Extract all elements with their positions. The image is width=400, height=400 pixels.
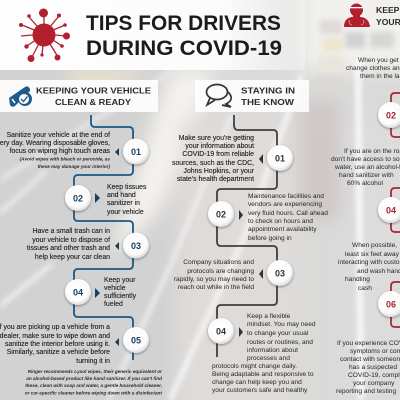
footnote: an alcohol-based product like hand sanitizer. If you can't find bbox=[26, 376, 162, 381]
icon: virus bbox=[19, 8, 70, 62]
step 03 bbox=[174, 259, 293, 291]
step 04: fueled bbox=[104, 301, 123, 308]
icon: speech bubbles bbox=[206, 84, 231, 107]
icon: sanitizer spray and shield bbox=[9, 86, 32, 107]
step 04: 04 bbox=[73, 288, 83, 298]
footnote: or car-specific cleaner before wiping down with a disinfectant bbox=[25, 390, 162, 396]
step 04: vehicle bbox=[104, 285, 126, 292]
step 01: Johns Hopkins, or your bbox=[184, 168, 255, 175]
step 02: your vehicle bbox=[107, 209, 144, 216]
step 04: mindset. You may need bbox=[247, 321, 316, 328]
step 05 bbox=[0, 324, 149, 365]
tip 4: reporting and testing bbox=[336, 388, 396, 395]
timeline: red bbox=[391, 93, 400, 327]
step 02 bbox=[65, 184, 147, 216]
step 01: 01 bbox=[131, 147, 141, 157]
step 05: sanitize the interior before using it. bbox=[5, 341, 110, 348]
step 04: Keep a flexible bbox=[247, 313, 291, 320]
step 01: sources, such as the CDC, bbox=[172, 160, 254, 167]
column 2 steps bbox=[172, 135, 328, 394]
step 02: to check on hours and bbox=[248, 218, 313, 225]
step 04: 04 bbox=[386, 206, 396, 216]
step 01: Sanitize your vehicle at the end of bbox=[7, 132, 110, 139]
heading: STAYING IN bbox=[241, 86, 295, 96]
step 01: focus on wiping high touch areas bbox=[10, 148, 111, 155]
step 04: change can help keep you and bbox=[212, 379, 302, 386]
title: DURING COVID-19 bbox=[86, 37, 282, 60]
step 03 bbox=[27, 228, 149, 261]
title: TIPS FOR DRIVERS bbox=[86, 12, 281, 35]
step 02 bbox=[208, 193, 328, 242]
step 03: Have a small trash can in bbox=[33, 228, 110, 235]
step 01: these may damage your interior) bbox=[38, 164, 110, 169]
step 05: 05 bbox=[131, 336, 141, 346]
step 02: vendors are experiencing bbox=[248, 201, 322, 208]
step 03: reach out while in the field bbox=[178, 284, 254, 291]
step 01: Make sure you're getting bbox=[179, 135, 254, 142]
step 01: 01 bbox=[275, 154, 285, 164]
step 04: sufficiently bbox=[104, 293, 137, 300]
timeline: grey bbox=[217, 115, 277, 357]
step 05: Similarly, sanitize a vehicle before bbox=[7, 349, 110, 356]
step 02: appointment availability bbox=[248, 226, 317, 233]
tip 4: your company bbox=[353, 380, 395, 387]
step 02: 02 bbox=[386, 110, 396, 120]
tip 4: has a suspected bbox=[349, 364, 397, 371]
tip 3: cash bbox=[358, 285, 372, 292]
step 01: your information about bbox=[185, 143, 254, 150]
step 04: routes or routines, and bbox=[247, 339, 313, 346]
step 04: processes and bbox=[247, 355, 290, 362]
title bbox=[86, 12, 282, 60]
timeline: blue bbox=[74, 115, 133, 360]
step 03: tissues and other trash and bbox=[27, 245, 110, 252]
step 03: 03 bbox=[131, 241, 141, 251]
step 05: If you are picking up a vehicle from a bbox=[0, 324, 110, 331]
step 02: and hand bbox=[107, 192, 136, 199]
step 04: protocols might change daily. bbox=[212, 363, 297, 370]
step 04: Being adaptable and responsive to bbox=[212, 371, 314, 378]
step 04: 04 bbox=[216, 326, 226, 336]
step 04: Keep your bbox=[104, 277, 136, 284]
panel: staying in the know bbox=[195, 80, 309, 112]
tip 2: hand sanitizer with bbox=[339, 172, 394, 179]
step 05: dealer, make sure to wipe down and bbox=[0, 333, 110, 340]
step 06 bbox=[378, 291, 400, 317]
step 03: Company situations and bbox=[183, 259, 254, 266]
tip 3: When possible, bbox=[352, 242, 397, 249]
step 01: COVID-19 from reliable bbox=[182, 151, 254, 158]
tip 3: least six feet away bbox=[345, 251, 400, 258]
step 03: protocols are changing bbox=[187, 268, 254, 275]
step 02: very fluid hours. Call ahead bbox=[248, 210, 328, 217]
panel: keeping your vehicle clean and ready: CLEAN & READY bbox=[55, 97, 131, 107]
icon: masked medic bbox=[344, 4, 370, 27]
step 03: rapidly, so you may need to bbox=[174, 276, 254, 283]
column 1 steps bbox=[0, 132, 163, 396]
step 02: 02 bbox=[73, 194, 83, 204]
step 02: before going in bbox=[248, 235, 292, 242]
step 02 bbox=[378, 102, 400, 128]
heading: KEEP bbox=[376, 5, 400, 15]
step 03: your vehicle to dispose of bbox=[32, 237, 110, 244]
step 01: state's health department bbox=[177, 176, 254, 183]
tip 2: 60% alcohol bbox=[347, 180, 383, 187]
step 02: sanitizer in bbox=[107, 200, 140, 207]
footnote: these, clean with soap and water, a gentle household cleaner, bbox=[25, 383, 162, 388]
tip 1: When you get bbox=[358, 57, 399, 64]
step 04: to change your usual bbox=[247, 330, 309, 337]
step 03: 03 bbox=[275, 268, 285, 278]
step 02: Maintenance facilities and bbox=[248, 193, 324, 200]
step 04: information about bbox=[247, 347, 298, 354]
step 01 bbox=[172, 135, 293, 183]
panel: keeping yourself safe bbox=[331, 4, 400, 395]
panel: keeping your vehicle clean and ready bbox=[0, 80, 158, 112]
step 04 bbox=[378, 197, 400, 223]
step 04 bbox=[208, 313, 316, 394]
step 02: 02 bbox=[216, 210, 226, 220]
step 03: help keep your car clean bbox=[35, 254, 110, 261]
footnote: Ringer recommends Lysol wipes, their generic equivalent or bbox=[28, 369, 163, 374]
step 01: (Avoid wipes with bleach or peroxide, as bbox=[20, 156, 110, 162]
tip 3: handling bbox=[345, 276, 370, 283]
step 02: Keep tissues bbox=[107, 184, 147, 191]
step 04: your customers safe and healthy bbox=[212, 387, 308, 394]
step 06: 06 bbox=[386, 300, 396, 310]
panel: staying in the know: THE KNOW bbox=[241, 97, 295, 107]
step 01 bbox=[0, 132, 149, 169]
heading: KEEPING YOUR VEHICLE bbox=[36, 86, 151, 96]
title panel bbox=[0, 0, 305, 70]
step 04 bbox=[65, 277, 137, 308]
step 05: turning it in bbox=[76, 358, 110, 365]
